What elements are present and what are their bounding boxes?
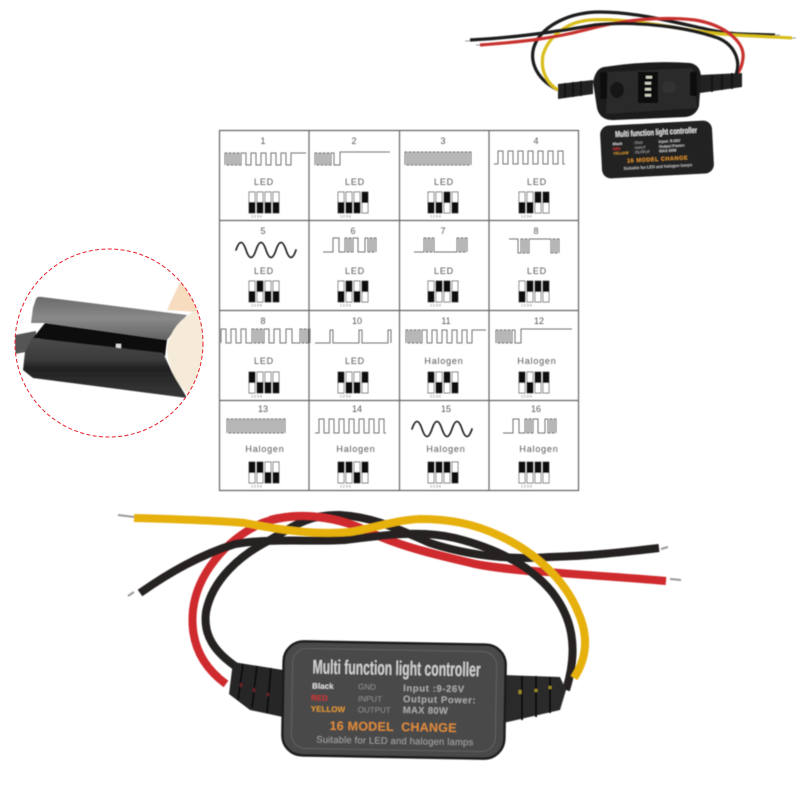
black wire from left free end — [140, 534, 573, 690]
controller body and label: MAX 80W — [403, 705, 448, 717]
mode 3: LED — [434, 177, 454, 187]
mode 9 (printed as 8): LED — [254, 356, 274, 366]
mode 15: Halogen — [426, 444, 466, 454]
mode 2: LED — [345, 177, 365, 187]
mode 5: LED — [254, 266, 274, 276]
mode 1 — [225, 136, 306, 218]
mode 11: 11 — [441, 316, 451, 326]
open controller base — [593, 62, 701, 120]
red dashed circle — [15, 249, 203, 437]
stripped wire tips — [118, 515, 681, 596]
mode 5 — [236, 226, 296, 308]
mode 9 (printed as 8): 1 2 3 4 — [251, 394, 262, 398]
mode 2: 1 2 3 4 — [340, 214, 351, 218]
mode 11 — [406, 316, 486, 398]
controller lid label: : GND — [633, 141, 643, 145]
mode 14 — [315, 404, 386, 488]
mode 6 — [323, 226, 376, 308]
controller lid label: Black — [613, 142, 622, 146]
controller body and label — [282, 641, 506, 759]
mode 6: LED — [345, 266, 365, 276]
mode 14: Halogen — [336, 444, 376, 454]
mode 14: 14 — [352, 404, 362, 414]
controller lid label: : INPUT — [633, 146, 647, 150]
mode 10 — [315, 316, 391, 398]
mode 8: 1 2 3 4 — [521, 304, 532, 308]
base interior and DIP switch — [600, 68, 697, 114]
mode 15: 15 — [441, 404, 451, 414]
mode 13: 1 2 3 4 — [251, 484, 262, 488]
mode 10: 10 — [352, 316, 362, 326]
mode 8: 8 — [533, 226, 539, 236]
controller body and label: Suitable for LED and halogen lamps — [316, 735, 474, 748]
photo: controller with open case and wires (top right) — [465, 12, 796, 179]
controller body and label: YELLOW — [311, 705, 346, 714]
mode 8: LED — [527, 266, 547, 276]
strain relief left and right — [558, 73, 742, 99]
controller body and label: Output Power: — [403, 694, 476, 706]
mode 11: 1 2 3 4 — [430, 394, 441, 398]
mode 16 — [503, 404, 559, 488]
mode 14: 1 2 3 4 — [340, 484, 351, 488]
yellow wire — [134, 518, 585, 678]
mode 13 — [227, 404, 285, 488]
left strain relief — [229, 662, 283, 717]
wires of top product — [465, 12, 796, 90]
controller lid label: Output Power: — [659, 144, 685, 149]
mode 5: 1 2 3 4 — [251, 304, 262, 308]
controller body and label: 16 MODEL CHANGE — [329, 719, 457, 735]
photo: fingers opening the case inside red dashed circle — [15, 249, 205, 437]
mode 1: 1 2 3 4 — [251, 214, 262, 218]
controller body and label: GND — [358, 682, 376, 692]
mode 1: LED — [254, 177, 274, 187]
mode 12 — [496, 316, 572, 398]
controller body and label: OUTPUT — [358, 705, 391, 715]
controller lid label: Suitable for LED and halogen lamps — [624, 162, 693, 171]
mode 11: Halogen — [424, 356, 464, 366]
controller lid label: : OUTPUT — [633, 150, 651, 155]
mode 16: 1 2 3 4 — [521, 484, 532, 488]
mode 15: 1 2 3 4 — [430, 484, 441, 488]
mode 12: 1 2 3 4 — [521, 394, 532, 398]
right strain relief — [503, 675, 566, 723]
controller body and label: Input :9-26V — [403, 683, 465, 695]
controller lid label: Input :9-26V — [659, 139, 681, 144]
controller body and label: RED — [311, 694, 328, 703]
mode 9 (printed as 8) — [221, 316, 310, 398]
mode 3: 3 — [440, 136, 446, 146]
red wire overlap — [270, 516, 535, 572]
mode 13: 13 — [258, 404, 268, 414]
mode 4: LED — [527, 177, 547, 187]
controller lid label: Multi function light controller — [615, 125, 698, 139]
mode 7: 7 — [440, 226, 446, 236]
mode 3 — [405, 136, 471, 218]
mode 4: 4 — [533, 136, 539, 146]
controller lid label — [600, 120, 714, 179]
mode 7: 1 2 3 4 — [430, 304, 441, 308]
mode 3: 1 2 3 4 — [430, 214, 441, 218]
grid lines — [220, 130, 578, 490]
mode 2 — [315, 136, 390, 218]
mode 4 — [494, 136, 565, 218]
mode 12: Halogen — [517, 356, 557, 366]
mode 7: LED — [434, 266, 454, 276]
mode 4: 1 2 3 4 — [521, 214, 532, 218]
mode 1: 1 — [260, 136, 266, 146]
switch mode table — [220, 130, 578, 490]
mode 10: 1 2 3 4 — [340, 394, 351, 398]
controller body and label: INPUT — [358, 694, 382, 704]
controller body and label: Black — [312, 682, 334, 691]
controller body and label: Multi function light controller — [312, 657, 481, 682]
mode 12: 12 — [534, 316, 544, 326]
mode 2: 2 — [351, 136, 357, 146]
controller lid label: YELLOW — [613, 151, 629, 156]
mode 13: Halogen — [245, 444, 285, 454]
mode 7 — [414, 226, 467, 308]
mode 9 (printed as 8): 8 — [260, 316, 266, 326]
photo: controller with twisted wires (bottom) — [118, 515, 681, 759]
mode 15 — [412, 404, 472, 488]
mode 6: 6 — [350, 226, 356, 236]
cropped photo contents — [15, 282, 205, 398]
mode 16: 16 — [531, 404, 541, 414]
mode 5: 5 — [260, 226, 266, 236]
mode 6: 1 2 3 4 — [340, 304, 351, 308]
black wire loop with right free end — [206, 515, 659, 668]
controller lid label: MAX 80W — [659, 148, 677, 153]
controller lid label: RED — [613, 147, 621, 151]
controller lid label: 16 MODEL CHANGE — [627, 155, 688, 165]
red wire — [192, 517, 666, 684]
mode 16: Halogen — [519, 444, 559, 454]
mode 10: LED — [345, 356, 365, 366]
mode 8 — [509, 226, 559, 308]
